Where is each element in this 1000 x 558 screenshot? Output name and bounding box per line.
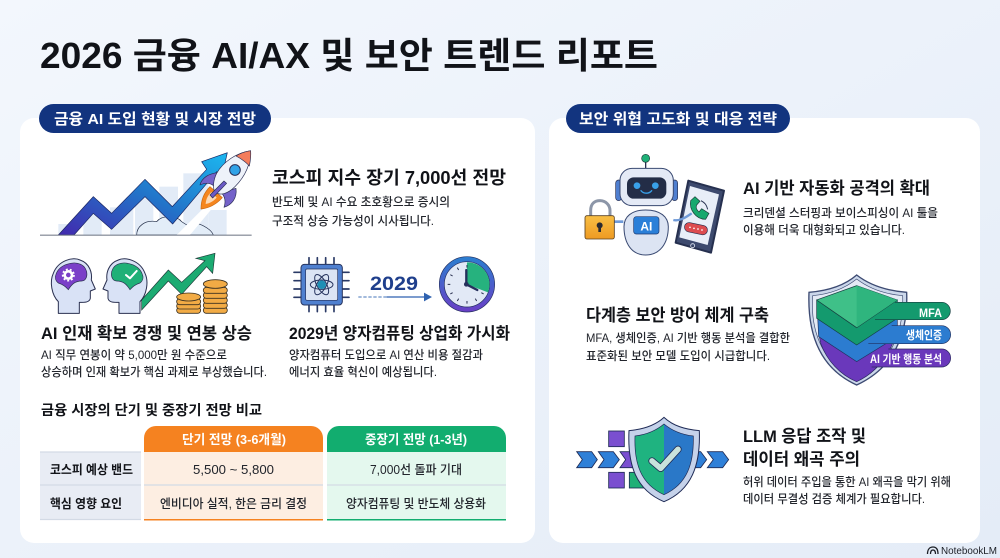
- table headers: 단기 전망 (3-6개월): [182, 432, 286, 447]
- comparison table: [40, 426, 506, 520]
- text block: layered defense: [586, 306, 790, 363]
- text block: quantum computing: 양자컴퓨터 도입으로 AI 연산 비용 절감과: [289, 348, 483, 362]
- icon: shield over data stream: [577, 417, 729, 502]
- row: KOSPI band: 7,000선 돌파 기대: [370, 463, 462, 477]
- heading: comparison table: 금융 시장의 단기 및 중장기 전망 비교: [41, 402, 262, 418]
- panel: market outlook: [20, 104, 535, 543]
- text block: layered defense: MFA, 생체인증, AI 기반 행동 분석을 결합한: [586, 330, 790, 345]
- heading: security threats: 보안 위협 고도화 및 대응 전략: [579, 111, 777, 128]
- row: KOSPI band: 5,500 ~ 5,800: [193, 463, 274, 477]
- heading: market outlook: [39, 104, 271, 133]
- icon: rocket and rising chart: [40, 151, 252, 236]
- text block: AI talent: [41, 324, 267, 379]
- text block: automated attacks: [743, 179, 938, 237]
- title: 2026 금융 AI/AX 및 보안 트렌드 리포트: [40, 35, 658, 76]
- watermark: NotebookLM: NotebookLM: [941, 545, 997, 557]
- row: KOSPI band: 코스피 예상 밴드: [50, 463, 133, 477]
- shield labels: 생체인증: [906, 329, 942, 342]
- icon: talent heads and salary growth: [51, 253, 227, 313]
- row: KOSPI band: [50, 463, 462, 477]
- shield labels: MFA: [919, 306, 942, 320]
- text block: layered defense: 표준화된 보안 모델 도입이 시급합니다.: [586, 348, 770, 363]
- text block: quantum computing: 2029년 양자컴퓨팅 상업화 가시화: [289, 324, 510, 343]
- icon: AI robot with lock and phone: AI: [640, 219, 652, 233]
- row: key factors: 엔비디아 실적, 한은 금리 결정: [160, 497, 307, 511]
- row: key factors: 핵심 영향 요인: [50, 496, 122, 511]
- text block: LLM manipulation: [743, 427, 951, 506]
- icon: quantum chip, 2029 arrow and clock: 2029: [370, 274, 418, 295]
- text block: KOSPI outlook: 구조적 상승 가능성이 시사됩니다.: [272, 214, 434, 228]
- text block: KOSPI outlook: 반도체 및 AI 수요 초호황으로 증시의: [272, 195, 450, 209]
- row: key factors: 양자컴퓨팅 및 반도체 상용화: [346, 497, 486, 511]
- icon: layered shield: [809, 275, 951, 385]
- text block: layered defense: 다계층 보안 방어 체계 구축: [586, 306, 769, 325]
- text block: quantum computing: 에너지 효율 혁신이 예상됩니다.: [289, 364, 437, 379]
- shield labels: AI 기반 행동 분석: [870, 352, 942, 366]
- table headers: 중장기 전망 (1-3년): [365, 432, 467, 447]
- text block: quantum computing: [289, 324, 510, 379]
- text block: LLM manipulation: 데이터 왜곡 주의: [743, 450, 860, 469]
- text block: AI talent: AI 직무 연봉이 약 5,000만 원 수준으로: [41, 348, 227, 362]
- icon: AI robot with lock and phone: [585, 154, 724, 255]
- text block: KOSPI outlook: 코스피 지수 장기 7,000선 전망: [272, 168, 506, 188]
- text block: AI talent: 상승하며 인재 확보가 핵심 과제로 부상했습니다.: [41, 364, 267, 379]
- icon: quantum chip, 2029 arrow and clock: [294, 257, 495, 312]
- heading: market outlook: 금융 AI 도입 현황 및 시장 전망: [54, 111, 256, 128]
- text block: automated attacks: 이용해 더욱 대형화되고 있습니다.: [743, 222, 905, 237]
- text block: automated attacks: 크리덴셜 스터핑과 보이스피싱이 AI 툴을: [743, 206, 938, 220]
- row: key factors: [50, 496, 486, 511]
- text block: LLM manipulation: LLM 응답 조작 및: [743, 427, 866, 446]
- text block: KOSPI outlook: [272, 168, 506, 228]
- shield labels: [870, 306, 942, 366]
- table headers: [182, 432, 467, 447]
- text block: LLM manipulation: 허위 데이터 주입을 통한 AI 왜곡을 막기 위해: [743, 475, 951, 489]
- text block: LLM manipulation: 데이터 무결성 검증 체계가 필요합니다.: [743, 491, 925, 506]
- panel: security threats: [549, 104, 980, 543]
- rocket: [200, 151, 251, 209]
- text block: AI talent: AI 인재 확보 경쟁 및 연봉 상승: [41, 324, 252, 343]
- text block: automated attacks: AI 기반 자동화 공격의 확대: [743, 179, 930, 198]
- heading: security threats: [566, 104, 790, 133]
